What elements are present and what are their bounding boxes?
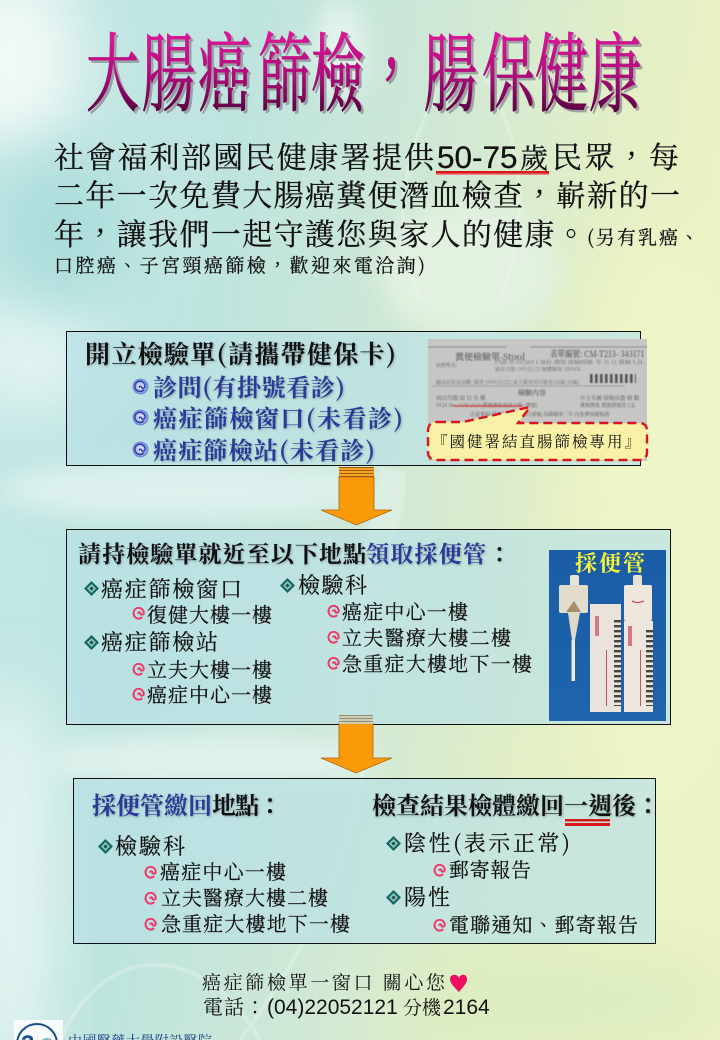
location: screening window: 癌症篩檢窗口 (101, 573, 242, 604)
callout: form note: 『國健署結直腸篩檢專用』 (432, 430, 640, 452)
panel: return sampling tube and results (74, 778, 660, 944)
result: negative: 陰性(表示正常) (404, 827, 570, 858)
form photo: 病歷姓名: (436, 362, 458, 369)
panel heading: ： (488, 536, 511, 569)
result detail: 電聯通知、郵寄報告 (449, 909, 638, 938)
sub location: 急重症大樓地下一樓 (161, 908, 350, 937)
hospital logo (14, 1020, 212, 1040)
icon: heart (450, 975, 467, 992)
title: 大腸癌篩檢，腸保健康 (88, 9, 644, 132)
intro text block: 社會福利部國民健康署提供 (54, 133, 435, 177)
form photo: 表單編號: CM-T213- 343171 (550, 347, 644, 360)
result: positive: 陽性 (404, 881, 450, 912)
intro text block: (另有乳癌、 (587, 223, 699, 250)
left heading: 採便管繳回 (92, 786, 212, 821)
photo caption: 採便管 (575, 547, 645, 578)
form photo: 注意事項:請依門診醫囑執行採檢,為篩檢第二年 內免費保健服務 (470, 411, 610, 418)
panel heading: 領取採便管 (366, 536, 486, 569)
right heading: 檢查結果檢體繳回一週後： (372, 786, 660, 821)
sub location: 癌症中心一樓 (160, 856, 286, 885)
form photo: 臨床症狀及診斷: 篩查 (099/12/22),成人篩查用自檢查(50歲-70歲) (436, 379, 580, 386)
location: laboratory: 檢驗科 (298, 569, 367, 600)
form photo: 門診 中 G1369 1 身份:健保 採檢時間: 年 月 日 採檢人員: (495, 359, 645, 366)
sub location: 立夫醫療大樓二樓 (342, 622, 511, 651)
intro text block: 二年一次免費大腸癌糞便潛血檢查，嶄新的一 (54, 171, 680, 215)
intro text block: 民眾，每 (552, 133, 679, 177)
form photo: 中文名稱 採檢容器 條 數 (580, 394, 640, 402)
intro text block (54, 133, 699, 278)
arrow 1 (321, 467, 392, 525)
panel heading: 請持檢驗單就近至以下地點 (78, 536, 366, 569)
sub location: 立夫大樓一樓 (147, 654, 272, 683)
intro text block: 50-75 (437, 139, 518, 175)
intro text block: 口腔癌、子宮頸癌篩檢，歡迎來電洽詢) (54, 251, 425, 278)
intro text block: 歲 (520, 137, 548, 177)
list item: clinic: 診問(有掛號看診) (153, 368, 345, 403)
left heading (92, 786, 282, 821)
title: 大腸癌篩檢，腸保健康 (86, 7, 642, 129)
sub location: 立夫醫療大樓二樓 (161, 882, 328, 911)
contact block: 癌症篩檢單一窗口 關心您 (202, 968, 446, 995)
form photo: 項目代碼 項 目 名 稱 (436, 394, 486, 402)
location: laboratory: 檢驗科 (115, 830, 185, 861)
panel heading: 開立檢驗單(請攜帶健保卡) (85, 335, 396, 371)
age underline (436, 171, 549, 175)
panel heading (78, 536, 511, 569)
intro text block: 年，讓我們一起守護您與家人的健康。 (54, 210, 586, 254)
sub location: 復健大樓一樓 (147, 599, 272, 628)
photo: sampling tubes (549, 547, 666, 721)
left heading: 地點： (212, 786, 282, 821)
contact block: (04)22052121 (267, 996, 398, 1019)
form photo (428, 339, 647, 461)
applicator stick (559, 575, 588, 681)
contact block: 2164 (443, 996, 490, 1019)
sub location: 癌症中心一樓 (147, 679, 272, 708)
contact block (202, 968, 490, 1020)
callout: form note (428, 407, 647, 460)
panel: pick up sampling tube (66, 530, 670, 724)
form photo: 糞便檢驗單-Stool (455, 350, 525, 363)
one week underline (565, 819, 610, 826)
form photo: 0924 Stool OB (EIA)糞便潛血免疫分析 (糞便) (436, 402, 538, 409)
form photo: 糞便潛血 糞便採便管 1支 (580, 402, 635, 409)
location: screening station: 癌症篩檢站 (101, 626, 218, 657)
list item: screening window: 癌症篩檢窗口(未看診) (153, 399, 403, 434)
contact block: 分機 (403, 993, 442, 1020)
form photo: 檢驗內容 (518, 388, 546, 398)
form photo: 就診日期: 099/12/22 檢體類別: STOOL (495, 366, 582, 373)
contact block: 電話： (203, 991, 265, 1020)
panel: issue test form (66, 332, 647, 466)
list item: screening station: 癌症篩檢站(未看診) (153, 431, 375, 466)
tube left (590, 604, 621, 712)
result detail: 郵寄報告 (449, 854, 531, 883)
sub location: 癌症中心一樓 (342, 596, 468, 625)
sub location: 急重症大樓地下一樓 (342, 648, 532, 677)
arrow 2 (321, 715, 392, 773)
tube right (624, 575, 653, 712)
